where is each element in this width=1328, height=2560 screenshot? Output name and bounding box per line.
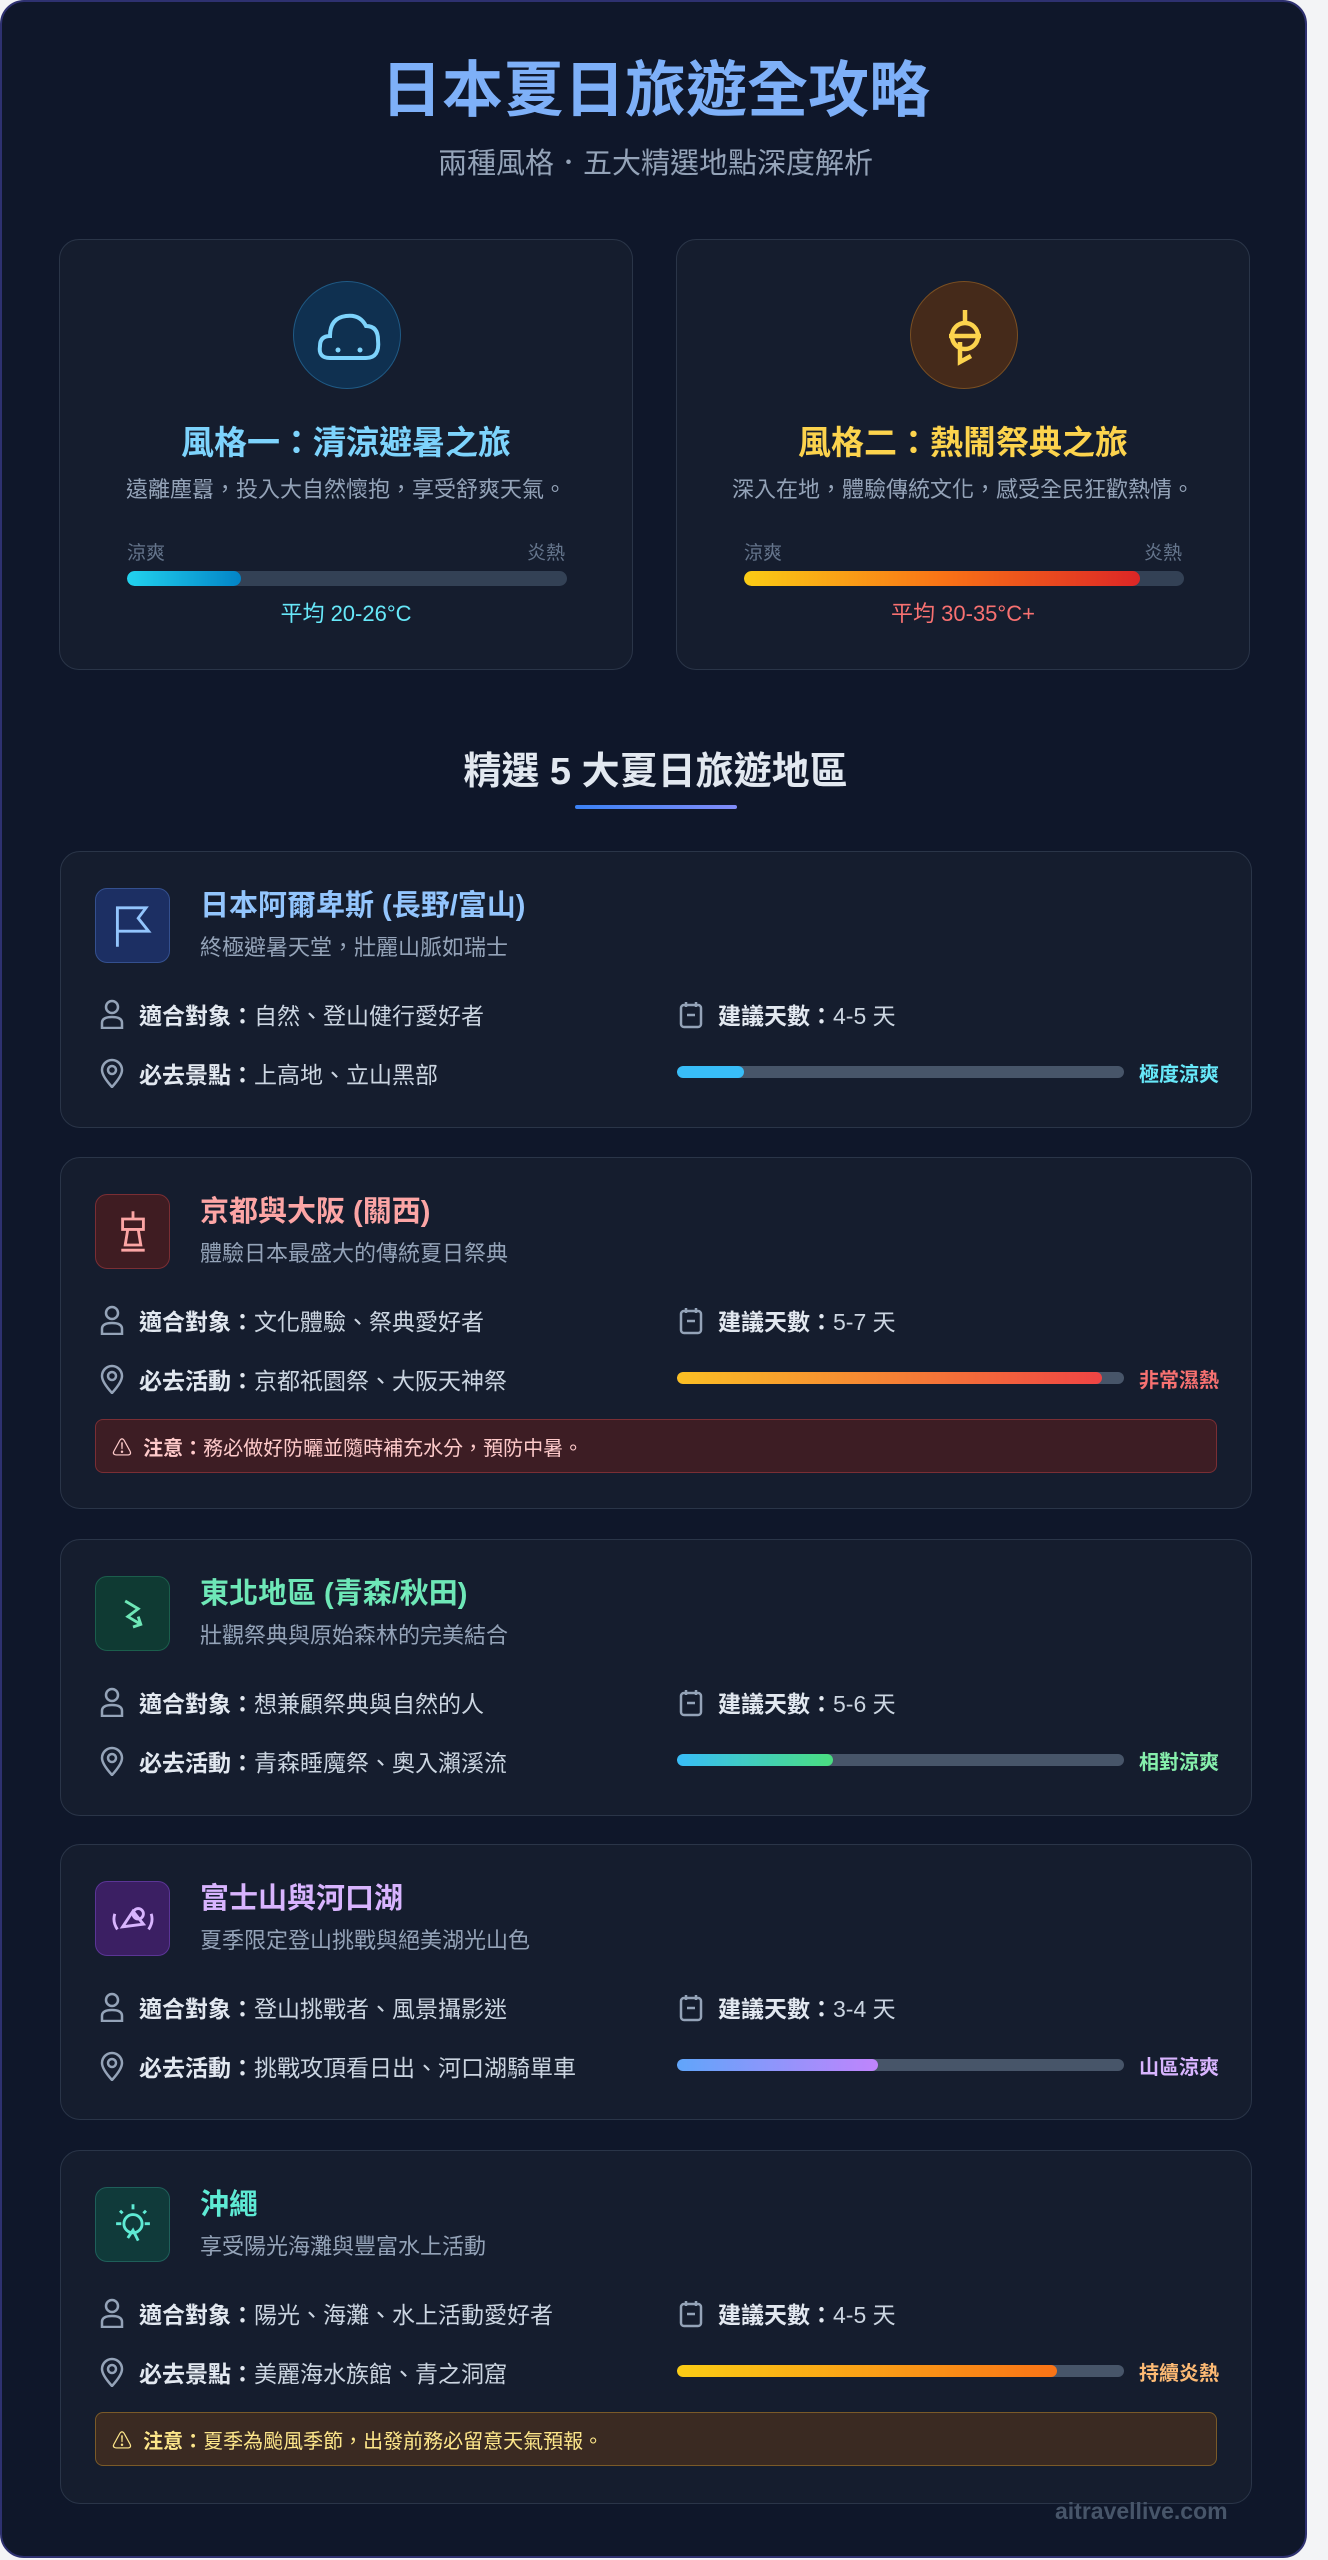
card: Kyoto Osaka: 非常濕熱	[1139, 1370, 1219, 1392]
row: activities: 挑戰攻頂看日出、河口湖騎單車	[254, 2055, 576, 2081]
icon: festival	[910, 281, 1018, 389]
heading: 風格一：清涼避暑之旅	[181, 424, 511, 461]
card: Japan Alps	[60, 851, 1252, 1128]
panel: style festival	[676, 239, 1250, 670]
bar: climate	[677, 1754, 1124, 1766]
row: audience	[100, 2298, 553, 2328]
row: sights	[100, 2358, 507, 2387]
row: sights	[100, 1058, 438, 1088]
card: Okinawa	[60, 2150, 1252, 2504]
row: audience: 自然、登山健行愛好者	[254, 1003, 484, 1029]
title: 京都與大阪 (關西)	[200, 1196, 430, 1228]
card: Fuji	[60, 1844, 1252, 2120]
panel: style cool	[59, 239, 633, 670]
panel: style cool: 炎熱	[527, 543, 565, 564]
callout: warning	[95, 1419, 1217, 1473]
card: Kyoto Osaka	[60, 1157, 1252, 1509]
row: sights: 美麗海水族館、青之洞窟	[254, 2361, 507, 2387]
row: activities: 京都祇園祭、大阪天神祭	[254, 1368, 507, 1394]
callout: warning	[95, 2412, 1217, 2466]
icon: cloud	[293, 281, 401, 389]
row: days: 5-7 天	[833, 1309, 896, 1335]
row: sights: 必去景點：	[139, 2361, 254, 2387]
subtitle: 終極避暑天堂，壯麗山脈如瑞士	[200, 935, 508, 960]
row: activities: 必去活動：	[139, 1368, 254, 1394]
row: days: 3-4 天	[833, 1996, 896, 2022]
row: days	[680, 1995, 896, 2022]
row: days: 建議天數：	[718, 2302, 833, 2328]
row: days: 5-6 天	[833, 1691, 896, 1717]
row: activities: 必去活動：	[139, 2055, 254, 2081]
row: days: 建議天數：	[718, 1996, 833, 2022]
row: days	[680, 1308, 896, 1335]
subtitle: 夏季限定登山挑戰與絕美湖光山色	[200, 1928, 530, 1953]
row: audience	[100, 1688, 484, 1717]
row: days: 建議天數：	[718, 1691, 833, 1717]
row: days	[680, 1002, 896, 1029]
average temp: 平均 30-35°C+	[891, 601, 1035, 626]
row: audience: 文化體驗、祭典愛好者	[254, 1309, 484, 1335]
card: Okinawa: 持續炎熱	[1139, 2363, 1219, 2385]
panel: style festival: 炎熱	[1144, 543, 1182, 564]
title: 日本夏日旅遊全攻略	[381, 56, 930, 124]
row: audience: 適合對象：	[139, 1309, 254, 1335]
row: days: 4-5 天	[833, 2302, 896, 2328]
subtitle: 兩種風格．五大精選地點深度解析	[438, 148, 873, 180]
section heading: 精選 5 大夏日旅遊地區	[463, 751, 848, 793]
callout: warning: ⚠ 務必做好防曬並隨時補充水分，預防中暑。	[112, 1438, 583, 1460]
description: 遠離塵囂，投入大自然懷抱，享受舒爽天氣。	[126, 477, 566, 502]
title: 沖繩	[200, 2189, 258, 2221]
icon: mountain	[95, 1881, 170, 1956]
subtitle: 體驗日本最盛大的傳統夏日祭典	[200, 1241, 508, 1266]
row: sights: 必去景點：	[139, 1062, 254, 1088]
row: audience	[100, 1000, 484, 1029]
bar: climate	[677, 2365, 1124, 2377]
card: Tohoku	[60, 1539, 1252, 1816]
icon: leaf	[95, 1576, 170, 1651]
row: activities	[100, 2052, 576, 2081]
subtitle: 壯觀祭典與原始森林的完美結合	[200, 1623, 508, 1648]
callout: warning: 注意：	[143, 1438, 203, 1460]
row: activities: 必去活動：	[139, 1750, 254, 1776]
panel: style cool: 涼爽	[127, 543, 165, 564]
row: days: 建議天數：	[718, 1003, 833, 1029]
subtitle: 享受陽光海灘與豐富水上活動	[200, 2234, 486, 2259]
row: activities	[100, 1364, 507, 1394]
callout: warning: 注意：	[143, 2430, 203, 2452]
row: audience: 登山挑戰者、風景攝影迷	[254, 1996, 507, 2022]
panel: style festival: 涼爽	[744, 543, 782, 564]
row: activities: 青森睡魔祭、奧入瀨溪流	[254, 1750, 507, 1776]
average temp: 平均 20-26°C	[280, 601, 412, 626]
bar: climate	[677, 1066, 1124, 1078]
row: audience: 陽光、海灘、水上活動愛好者	[254, 2302, 553, 2328]
row: audience	[100, 1306, 484, 1335]
row: days	[680, 2301, 896, 2328]
bar: climate	[677, 1372, 1124, 1384]
heading: 風格二：熱鬧祭典之旅	[798, 424, 1128, 461]
row: days: 4-5 天	[833, 1003, 896, 1029]
row: audience	[100, 1992, 507, 2022]
card: Fuji: 山區涼爽	[1139, 2057, 1219, 2079]
row: activities	[100, 1746, 507, 1776]
icon: sun	[95, 2187, 170, 2262]
icon: lantern	[95, 1194, 170, 1269]
row: audience: 適合對象：	[139, 1996, 254, 2022]
row: audience: 想兼顧祭典與自然的人	[254, 1691, 484, 1717]
description: 深入在地，體驗傳統文化，感受全民狂歡熱情。	[732, 477, 1194, 502]
row: audience: 適合對象：	[139, 1003, 254, 1029]
title: 富士山與河口湖	[200, 1883, 403, 1915]
temperature bar	[127, 571, 567, 586]
icon: flag	[95, 888, 170, 963]
callout: warning: ⚠ 夏季為颱風季節，出發前務必留意天氣預報。	[112, 2430, 603, 2452]
title: 日本阿爾卑斯 (長野/富山)	[200, 890, 525, 922]
row: days: 建議天數：	[718, 1309, 833, 1335]
row: sights: 上高地、立山黑部	[254, 1062, 438, 1088]
title: 東北地區 (青森/秋田)	[200, 1578, 467, 1610]
row: days	[680, 1690, 896, 1717]
card: Japan Alps: 極度涼爽	[1139, 1064, 1219, 1086]
watermark: aitravellive.com	[1055, 2498, 1228, 2524]
card: Tohoku: 相對涼爽	[1139, 1752, 1219, 1774]
row: audience: 適合對象：	[139, 1691, 254, 1717]
temperature bar	[744, 571, 1184, 586]
row: audience: 適合對象：	[139, 2302, 254, 2328]
bar: climate	[677, 2059, 1124, 2071]
